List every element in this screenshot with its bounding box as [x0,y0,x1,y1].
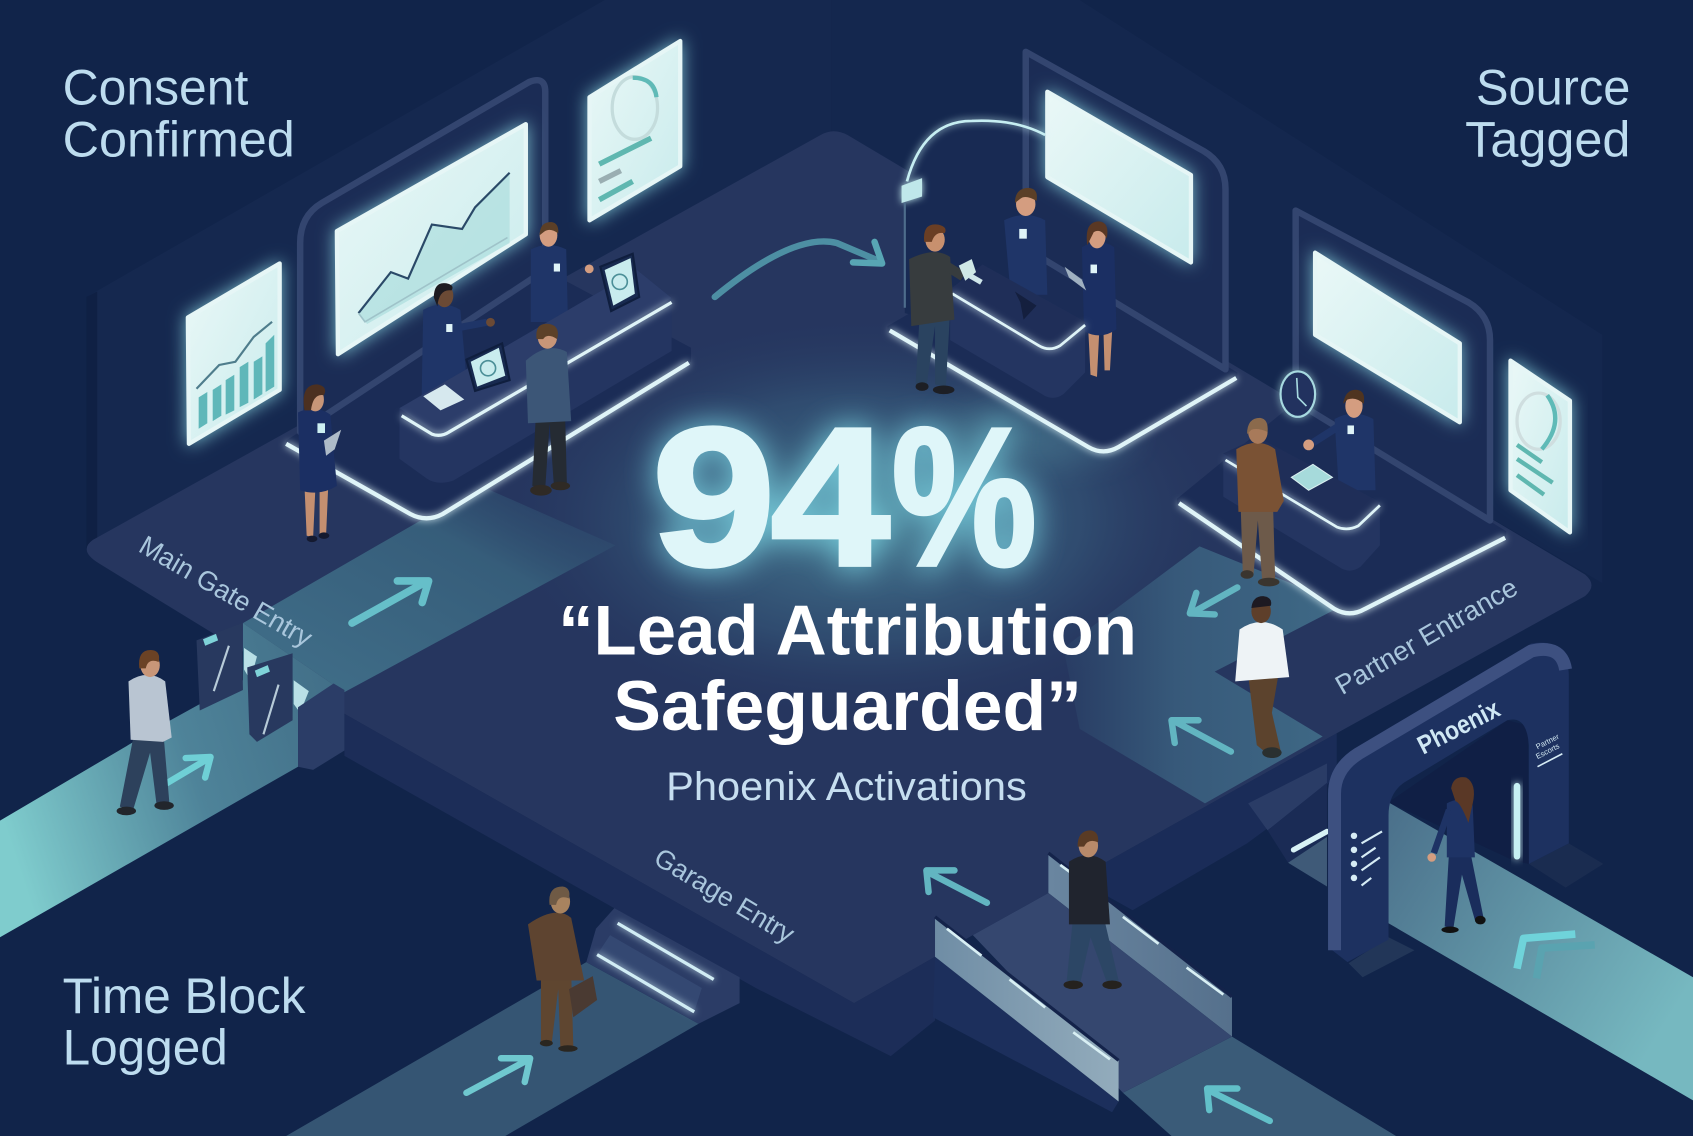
booth platform [888,246,1237,452]
floor label: Partner Entrance: Partner Entrance [1330,572,1523,701]
right ring panel [590,41,680,220]
arch base slabs [1349,937,1414,977]
label: Consent Confirmed [63,60,295,168]
right rail [1048,853,1232,1037]
dark area under arc [905,121,1045,324]
tablet with check [600,254,639,311]
label: Source Tagged [1465,60,1630,168]
arch small sign: Escorts [1534,741,1561,761]
headline figures [652,387,1037,607]
wall screen [1047,92,1191,262]
arrow: ramp exit [1207,1088,1270,1121]
subtitle [558,590,1137,745]
customer in brown suit [1236,418,1284,586]
booth platform [1177,402,1506,614]
gate end block [298,684,344,770]
staff woman behind counter [421,283,495,409]
left rail lower wall [933,957,1119,1112]
reception counter [950,265,1085,398]
floor band: main gate [243,486,615,692]
floor label: Garage Entry: Garage Entry [649,842,800,949]
ramp surface [973,893,1232,1093]
headline glow: 9 [652,387,775,607]
receptionist woman with tablet [298,384,341,542]
booth platform [286,270,691,518]
ground path: phoenix walkway [1389,802,1693,1100]
label: Consent Confirmed: Confirmed [63,112,295,168]
paper on counter [423,384,464,410]
teal light spill under booth [939,400,1134,464]
label: Source Tagged: Source [1476,60,1630,116]
ground path: garage [286,962,699,1136]
arrow: partner lower [1171,720,1231,752]
reception counter [399,270,672,483]
reception counter [1223,437,1380,571]
arrow: phoenix chevrons [1517,934,1595,978]
arch sign: Phoenix: Phoenix [1413,695,1505,760]
headline figures: 9 [652,387,775,607]
man walking left walkway [117,650,174,815]
floor label: Main Gate Entry: Main Gate Entry [134,530,318,653]
arc post [904,203,906,308]
headline glow [652,387,1037,607]
label: Source Tagged: Tagged [1465,112,1630,168]
back walls [86,0,1602,583]
arrow: main gate band [352,581,429,623]
arrow: garage path [466,1058,530,1093]
arch small sign: Partner [1534,732,1561,751]
staff woman [1065,221,1116,377]
ground path: ramp exit [1123,1037,1396,1136]
arch outer edge [1335,649,1566,950]
subtitle: Safeguarded” [613,666,1082,745]
arch opening [1389,720,1529,864]
entrance arch side steps [1248,763,1327,887]
staff man [1004,188,1047,295]
subtitle: “Lead Attribution [558,590,1137,669]
glowing arc [907,121,1045,181]
label: Consent Confirmed: Consent [63,60,249,116]
wall screen [1315,253,1460,422]
arch small sign [1534,732,1562,767]
booth: source tagged [888,52,1237,464]
gate two [247,653,309,742]
wall clock [1281,371,1315,417]
arc device [902,178,922,203]
label: Time Block Logged [63,968,306,1076]
arch wayfinding lines [1352,831,1382,885]
right document panel [1511,361,1570,532]
turnstile gates [197,623,344,770]
phoenix arch [1328,643,1603,977]
tablet with check [466,343,510,391]
ground path: main gate walkway [0,623,344,937]
booth: consent confirmed [188,41,691,542]
woman walking through arch [1427,777,1486,933]
staff man [1303,390,1376,490]
headline glow: 4 [771,387,890,607]
arrow: walkway [167,757,211,783]
garage steps [586,908,740,1024]
teal floor glow [497,313,1231,723]
headline glow: % [892,387,1037,607]
garage wall face [344,714,935,1056]
arrow: curved to source tagged [715,241,882,297]
right wall face [1069,733,1337,910]
booth back frame [1296,211,1490,520]
man on ramp [1064,830,1122,989]
left bar chart panel [188,263,280,444]
main floor platform [87,131,1592,1056]
arch light bar [1514,783,1520,860]
man in brown suit with briefcase [528,887,597,1052]
man in white shirt [1235,596,1289,758]
arrow: partner upper [1190,587,1237,614]
arch body [1328,643,1569,962]
staff man behind counter [531,222,594,322]
94% headline [652,387,1037,607]
rail top edges and lights [935,853,1232,1060]
booth back frame [300,80,545,432]
booth: time block logged desk [1177,211,1570,614]
main chart screen [337,124,526,354]
label: Time Block Logged: Logged [63,1020,228,1076]
booth back frame [1026,52,1225,369]
arch right base slab [1529,843,1603,888]
floor top [87,131,1592,1003]
headline figures: 4 [771,387,890,607]
floor band: partner entrance [1064,546,1344,803]
headline figures: % [892,387,1037,607]
label: Time Block Logged: Time Block [63,968,306,1024]
gate one [197,623,257,711]
arrow: ramp upper [926,870,987,903]
left rail [935,917,1119,1101]
customer in blue suit [526,324,571,496]
customer in dark suit with phone [909,224,976,394]
ramp with glass rails [933,853,1232,1112]
caption: Phoenix Activations: Phoenix Activations [666,765,1027,809]
